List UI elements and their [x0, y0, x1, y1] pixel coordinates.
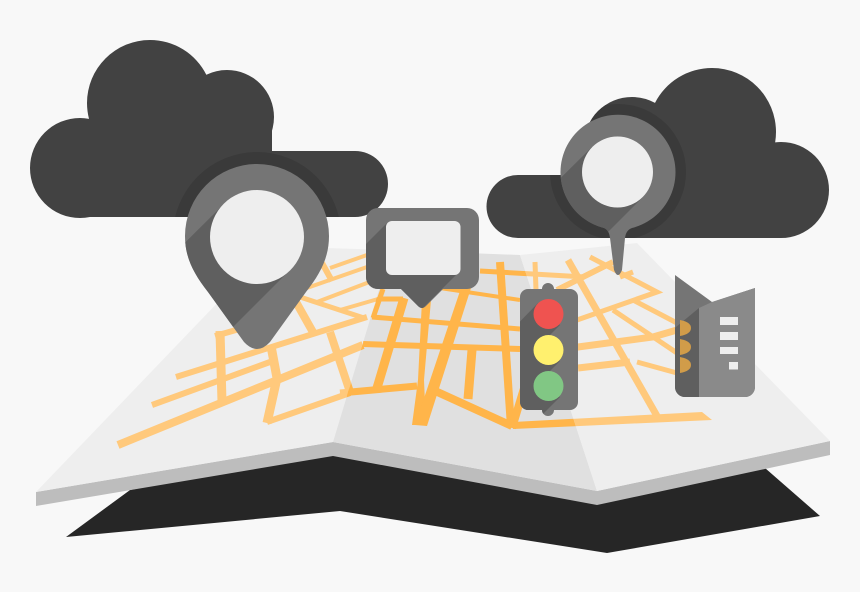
map panel: left fold — [36, 248, 391, 492]
map panel: middle fold — [333, 250, 597, 491]
building bumps — [680, 320, 691, 373]
building windows — [720, 317, 738, 370]
yellow light — [534, 335, 564, 365]
traffic light — [520, 283, 578, 416]
pin hole — [210, 190, 304, 284]
map ground shadow — [66, 450, 820, 553]
bubble screen — [386, 221, 460, 275]
map paper edge — [36, 441, 830, 506]
red light — [534, 299, 564, 329]
street network — [118, 255, 712, 445]
green light — [534, 371, 564, 401]
location pin: large left — [185, 164, 329, 349]
map panel: right fold — [520, 243, 830, 491]
folded map — [36, 243, 830, 506]
cloud: right — [486, 68, 829, 238]
cloud: left — [30, 40, 388, 218]
location pin: right — [560, 114, 676, 275]
speech-bubble marker — [366, 208, 479, 308]
building folded sign — [675, 275, 755, 397]
pin hole — [582, 136, 653, 208]
